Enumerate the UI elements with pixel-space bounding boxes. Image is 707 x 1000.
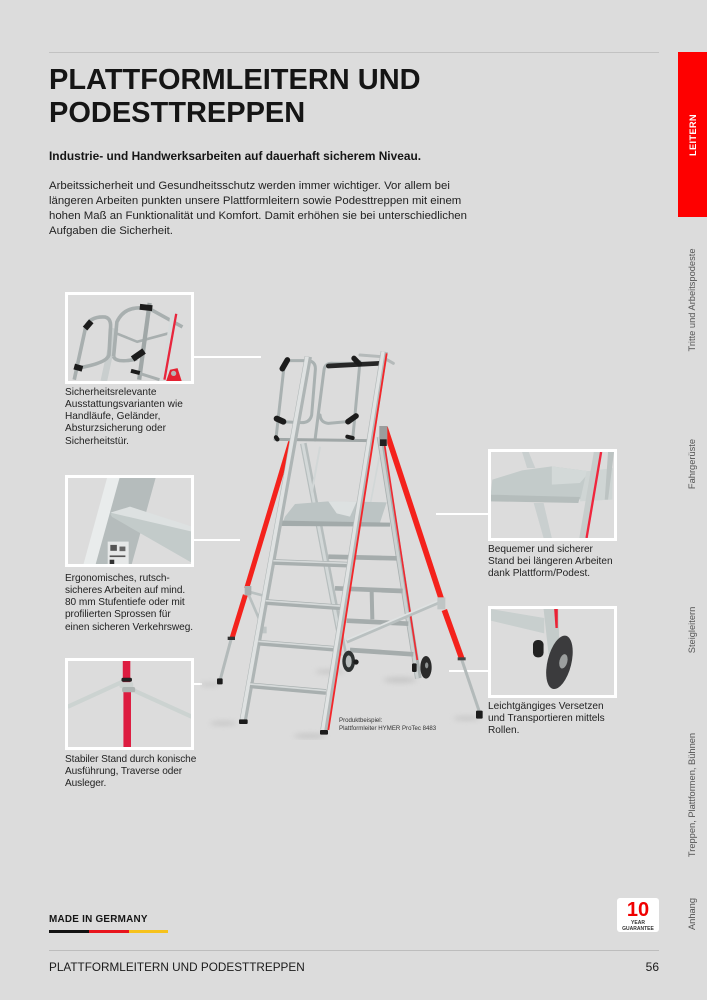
guarantee badge: GUARANTEE	[622, 926, 654, 932]
platform	[282, 501, 390, 527]
intro text: längeren Arbeiten punkten unsere Plattformleitern sowie Podesttreppen mit einem	[49, 195, 461, 207]
sidebar label: Treppen, Plattformen, Bühnen: Treppen, Plattformen, Bühnen	[687, 733, 697, 857]
guarantee badge: 10	[627, 899, 649, 921]
red left leg	[217, 442, 291, 684]
red right leg	[379, 426, 483, 719]
product note: Produktbeispiel:	[339, 717, 382, 724]
title: PLATTFORMLEITERN UND	[49, 64, 421, 96]
rear ladder	[303, 437, 418, 678]
page number: 56	[646, 960, 659, 974]
intro text: Aufgaben die Sicherheit.	[49, 225, 173, 237]
inset: platform	[488, 449, 617, 541]
caption: safety railings	[65, 387, 183, 447]
caption: ergonomic step	[65, 573, 193, 633]
caption: stable stand: Stabiler Stand durch konische	[65, 754, 196, 765]
caption: wheels: und Transportieren mittels	[488, 713, 605, 724]
sidebar label: Anhang: Anhang	[687, 898, 697, 930]
caption: stable stand: Ausleger.	[65, 778, 106, 789]
sidebar label: Steigleitern: Steigleitern	[687, 607, 697, 653]
caption: platform: dank Plattform/Podest.	[488, 568, 590, 579]
sidebar label: Fahrgerüste: Fahrgerüste	[687, 439, 697, 489]
intro text	[49, 180, 467, 237]
sidebar tab: Leitern	[678, 52, 707, 217]
inset: ergonomic step	[65, 475, 194, 567]
ladder illustration	[200, 351, 483, 740]
made in germany	[49, 914, 168, 933]
caption: platform	[488, 544, 613, 579]
caption: wheels: Rollen.	[488, 725, 519, 736]
caption: ergonomic step: 80 mm Stufentiefe oder mit	[65, 597, 185, 608]
caption: wheels	[488, 701, 605, 736]
caption: ergonomic step: einen sicheren Verkehrsweg.	[65, 622, 193, 633]
caption: ergonomic step: Ergonomisches, rutsch-	[65, 573, 170, 584]
caption: safety railings: Absturzsicherung oder	[65, 423, 166, 434]
front ladder	[239, 352, 387, 735]
guard rails	[275, 355, 393, 441]
sidebar label: Tritte und Arbeitspodeste: Tritte und Arbeitspodeste	[687, 248, 697, 352]
guarantee badge	[617, 898, 659, 932]
caption: safety railings: Sicherheitsrelevante	[65, 387, 156, 398]
caption: ergonomic step: profilierten Sprossen für	[65, 609, 171, 620]
caption: stable stand	[65, 754, 196, 789]
caption: platform: Stand bei längeren Arbeiten	[488, 556, 613, 567]
title: PODESTTREPPEN	[49, 96, 305, 128]
caption: stable stand: Ausführung, Traverse oder	[65, 766, 182, 777]
caption: platform: Bequemer und sicherer	[488, 544, 593, 555]
wheels	[342, 651, 432, 679]
title	[49, 64, 421, 128]
caption: safety railings: Sicherheitstür.	[65, 436, 129, 447]
inset: safety railings	[65, 292, 194, 384]
product note: Plattformleiter HYMER ProTec 8483	[339, 725, 436, 732]
caption: safety railings: Ausstattungsvarianten wie	[65, 399, 183, 410]
caption: safety railings: Handläufe, Geländer,	[65, 411, 160, 422]
braces	[245, 586, 445, 642]
subheading: Industrie- und Handwerksarbeiten auf dauerhaft sicherem Niveau.	[49, 149, 421, 163]
caption: ergonomic step: sicheres Arbeiten auf mind.	[65, 585, 185, 596]
made in germany: MADE IN GERMANY	[49, 914, 148, 925]
inset: stable stand	[65, 658, 194, 750]
inset: wheels	[488, 606, 617, 698]
caption: wheels: Leichtgängiges Versetzen	[488, 701, 604, 712]
intro text: hohen Maß an Funktionalität und Komfort. Damit erhöhen sie bei unterschiedlichen	[49, 210, 467, 222]
footer title: PLATTFORMLEITERN UND PODESTTREPPEN	[49, 961, 305, 974]
floor shadows	[200, 670, 480, 738]
sidebar label: Leitern: LEITERN	[688, 114, 698, 156]
product note	[339, 717, 436, 732]
guarantee badge: YEAR	[631, 920, 645, 926]
intro text: Arbeitssicherheit und Gesundheitsschutz werden immer wichtiger. Vor allem bei	[49, 180, 450, 192]
